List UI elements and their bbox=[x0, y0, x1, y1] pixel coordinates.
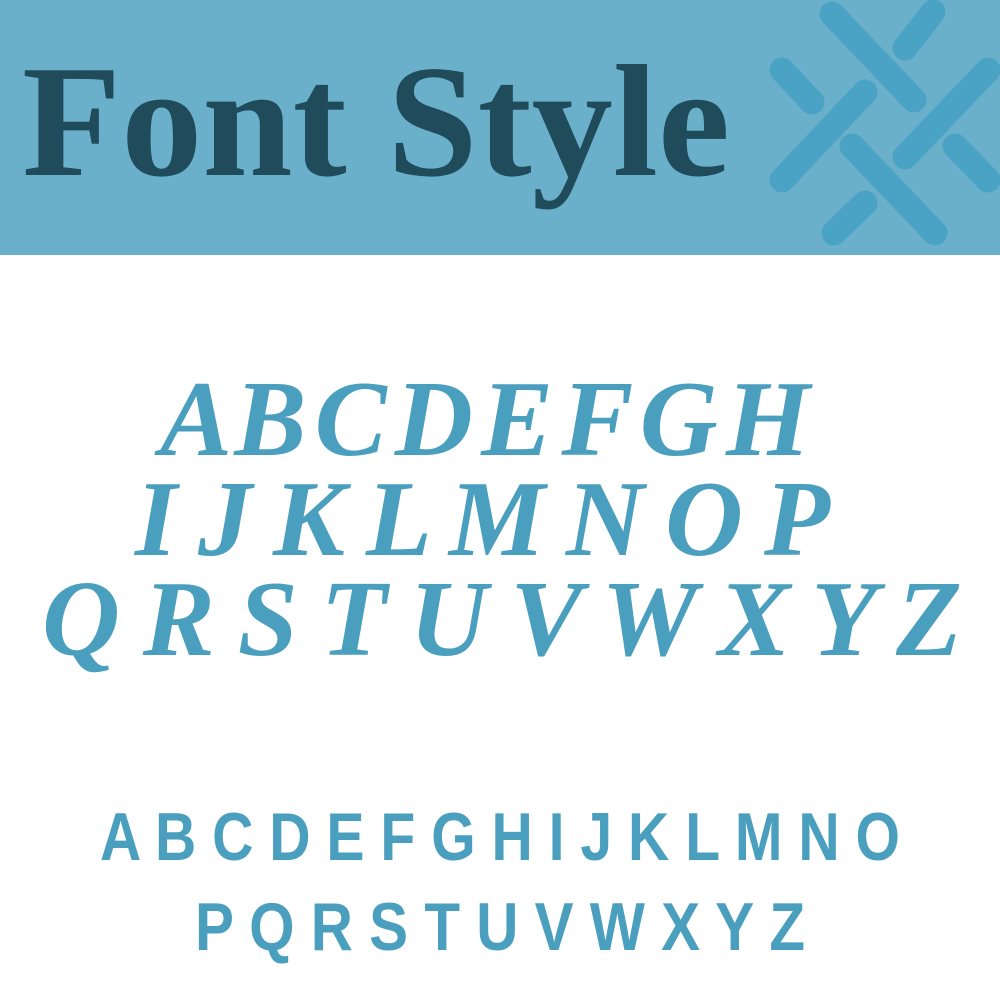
sans alphabet bbox=[100, 799, 900, 965]
header band bbox=[0, 0, 1000, 255]
script alphabet: Q R S T U V W X Y Z bbox=[42, 560, 962, 679]
title: Font Style bbox=[22, 32, 730, 210]
icon: woven lattice bbox=[782, 12, 988, 233]
script alphabet: A B C D E F G H bbox=[154, 360, 813, 479]
script alphabet bbox=[42, 360, 962, 679]
sans alphabet: P Q R S T U V W X Y Z bbox=[195, 889, 805, 965]
script alphabet: I J K L M N O P bbox=[133, 460, 831, 579]
